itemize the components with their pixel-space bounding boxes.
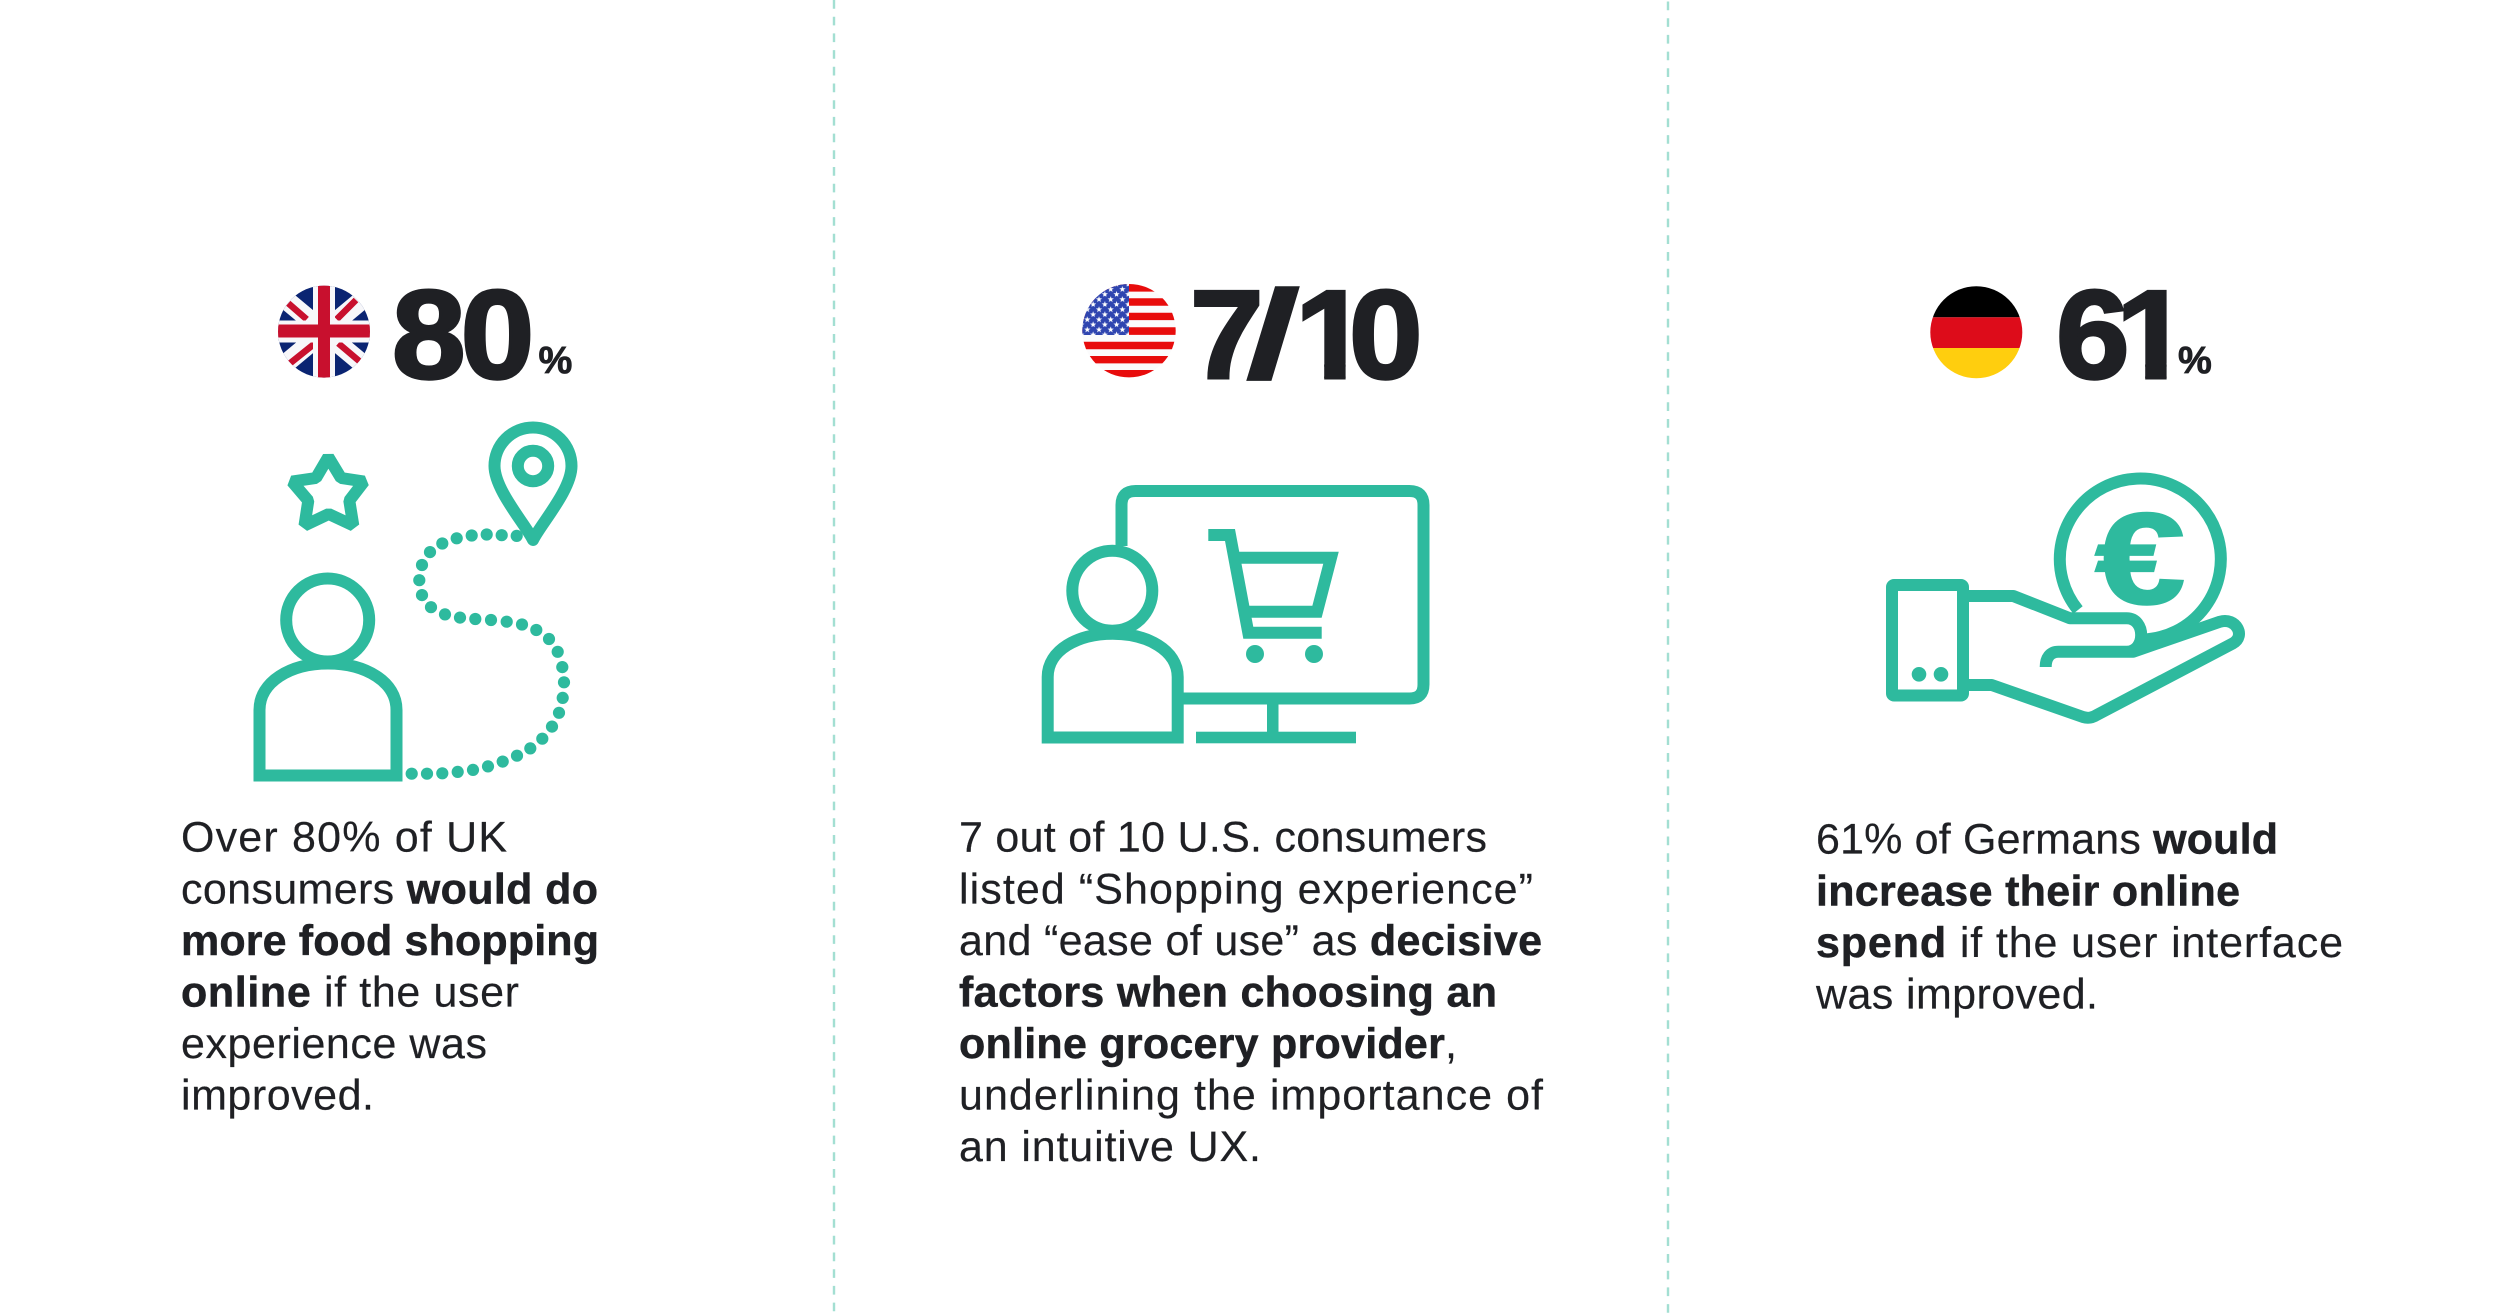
text block: US description: listed “Shopping experience” (959, 865, 1533, 913)
heading: 80%: 80 (392, 265, 534, 405)
text block: UK description: online if the user (181, 969, 519, 1017)
text block: US description (959, 814, 1544, 1171)
divider: right dashed line (1667, 0, 1669, 1313)
icon: dotted route (406, 528, 570, 780)
text block: Germany description: increase their online (1816, 868, 2240, 916)
icon: German flag (1930, 286, 2022, 378)
icon: monitor (1122, 491, 1424, 743)
icon: shopping cart (1208, 535, 1331, 663)
icon: coin (2060, 479, 2221, 640)
text block: Germany description (1815, 815, 2343, 1018)
text block: US description: 7 out of 10 U.S. consumers (959, 814, 1487, 862)
text block: UK description: experience was (181, 1020, 487, 1068)
text block: Germany description: spend if the user interface (1816, 919, 2343, 967)
icon: hand (1968, 596, 2239, 718)
text block: UK description: improved. (181, 1072, 374, 1120)
icon: location pin (494, 428, 572, 540)
text block: US description: and “ease of use” as decisive (959, 917, 1542, 965)
text block: US description: online grocery provider, (959, 1020, 1457, 1068)
text block: UK description: consumers would do (181, 865, 598, 913)
icon: star (292, 457, 364, 526)
heading: 7/10 (1194, 286, 1419, 381)
text block: UK description: Over 80% of UK (181, 814, 507, 862)
icon: coin: € (2095, 487, 2185, 632)
icon: UK flag (278, 286, 370, 378)
heading: 7/10: 0 (1349, 265, 1423, 405)
icon: person with star and route to location pin (260, 428, 572, 780)
panel: Germany statistic (1815, 265, 2343, 1018)
text block: US description: underlining the importance of (959, 1072, 1544, 1120)
icon: person at computer with shopping cart (1048, 491, 1424, 743)
text block: UK description: more food shopping (181, 917, 599, 965)
text block: Germany description: 61% of Germans would (1816, 815, 2278, 863)
icon: US flag (1082, 284, 1176, 378)
text block: UK description (181, 814, 599, 1120)
heading: 61% (2059, 288, 2212, 381)
heading: 61%: % (2178, 340, 2212, 382)
heading: 61%: 1 (2116, 265, 2190, 405)
heading: 80%: % (538, 340, 572, 382)
heading: 7/10: / (1245, 264, 1301, 405)
heading: 7/10: 7 (1190, 265, 1264, 405)
icon: hand holding euro coin (1892, 479, 2239, 718)
divider: left dashed line (833, 0, 835, 1313)
icon: cuff (1892, 585, 1963, 696)
text block: US description: an intuitive UX. (959, 1123, 1261, 1171)
panel: US statistic (959, 264, 1544, 1171)
icon: person (260, 578, 396, 776)
text block: US description: factors when choosing an (959, 969, 1497, 1017)
heading: 61%: 6 (2056, 265, 2130, 405)
panel: UK statistic (181, 265, 599, 1120)
icon: person (1048, 551, 1178, 738)
heading: 7/10: 1 (1295, 265, 1369, 405)
text block: Germany description: was improved. (1815, 970, 2098, 1018)
